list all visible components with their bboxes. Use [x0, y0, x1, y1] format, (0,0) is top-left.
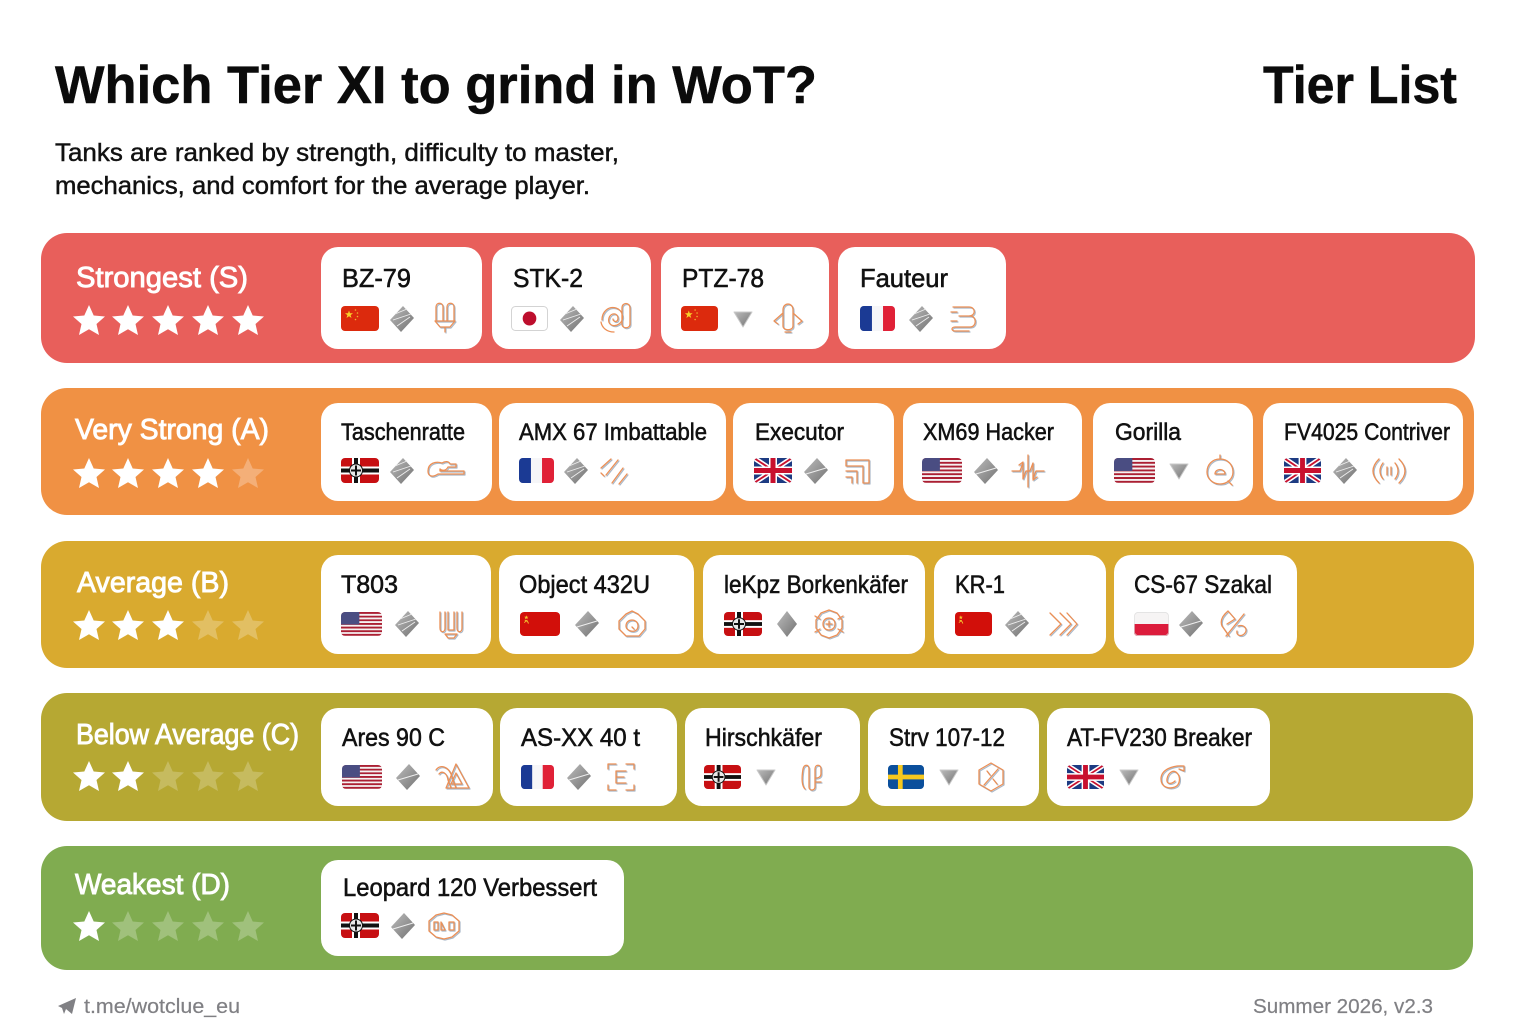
- card: STK-2: STK-2: [513, 263, 583, 293]
- card: Executor: Executor: [755, 419, 844, 446]
- card: Fauteur: Fauteur: [860, 263, 948, 293]
- card: Fauteur: [838, 247, 1006, 349]
- card: AMX 67 Imbattable: [499, 403, 726, 501]
- panel: tier S: [41, 233, 1475, 363]
- card: KR-1: [934, 555, 1106, 654]
- card: FV4025 Contriver: FV4025 Contriver: [1284, 419, 1450, 446]
- card: AS-XX 40 t: AS-XX 40 t: [521, 724, 640, 752]
- card: Strv 107-12: Strv 107-12: [889, 724, 1005, 752]
- card: STK-2: [492, 247, 651, 349]
- panel: tier B: [41, 541, 1474, 668]
- card: CS-67 Szakal: [1114, 555, 1297, 654]
- card: T803: T803: [341, 571, 398, 599]
- card: Leopard 120 Verbessert: [321, 860, 624, 956]
- card: Object 432U: Object 432U: [519, 571, 650, 599]
- card: leKpz Borkenkäfer: [703, 555, 925, 654]
- rating stars S: [73, 305, 264, 335]
- card: Ares 90 C: Ares 90 C: [342, 724, 445, 752]
- card: KR-1: KR-1: [955, 571, 1005, 599]
- card: Gorilla: Gorilla: [1115, 419, 1182, 446]
- panel: tier D: [41, 846, 1473, 970]
- description text: Tanks are ranked by strength, difficulty to master,: [55, 139, 619, 167]
- card: BZ-79: [321, 247, 482, 349]
- description text: mechanics, and comfort for the average player.: [55, 172, 590, 200]
- card: AS-XX 40 t: [500, 708, 677, 806]
- rating stars B: [73, 610, 264, 640]
- card: PTZ-78: [661, 247, 829, 349]
- subtitle heading: Tier List: [1263, 56, 1457, 115]
- card: Strv 107-12: [868, 708, 1039, 806]
- card: Hirschkäfer: [685, 708, 860, 806]
- footer: version: Summer 2026, v2.3: [1253, 996, 1433, 1018]
- card: FV4025 Contriver: [1263, 403, 1463, 501]
- card: Leopard 120 Verbessert: Leopard 120 Verbessert: [343, 874, 597, 902]
- panel: tier A: [41, 388, 1474, 515]
- card: leKpz Borkenkäfer: leKpz Borkenkäfer: [724, 571, 908, 599]
- card: CS-67 Szakal: CS-67 Szakal: [1134, 571, 1272, 599]
- card: T803: [321, 555, 491, 654]
- title: Which Tier XI to grind in WoT?: [55, 56, 817, 115]
- tier label D: Weakest (D): [75, 869, 230, 901]
- card: Object 432U: [499, 555, 694, 654]
- footer: telegram link: t.me/wotclue_eu: [84, 996, 240, 1018]
- card: XM69 Hacker: XM69 Hacker: [923, 419, 1054, 446]
- card: AMX 67 Imbattable: AMX 67 Imbattable: [519, 419, 707, 446]
- card: Gorilla: [1093, 403, 1253, 501]
- card: PTZ-78: PTZ-78: [682, 263, 764, 293]
- card: Ares 90 C: [321, 708, 493, 806]
- rating stars A: [73, 458, 264, 488]
- tier label C: Below Average (C): [76, 719, 299, 751]
- card: Executor: [733, 403, 894, 501]
- card: AT-FV230 Breaker: [1047, 708, 1270, 806]
- card: Taschenratte: [321, 403, 492, 501]
- card: Taschenratte: Taschenratte: [341, 419, 465, 446]
- card: Hirschkäfer: Hirschkäfer: [705, 724, 822, 752]
- panel: tier C: [41, 693, 1473, 821]
- description text: [55, 139, 619, 200]
- rating stars D: [73, 911, 264, 941]
- card: XM69 Hacker: [903, 403, 1082, 501]
- tier label A: Very Strong (A): [75, 414, 269, 446]
- rating stars C: [73, 761, 264, 791]
- tier label B: Average (B): [77, 567, 229, 599]
- card: BZ-79: BZ-79: [342, 263, 411, 293]
- tier label S: Strongest (S): [76, 262, 248, 294]
- card: AT-FV230 Breaker: AT-FV230 Breaker: [1067, 724, 1252, 752]
- icon: paper plane: [58, 998, 76, 1014]
